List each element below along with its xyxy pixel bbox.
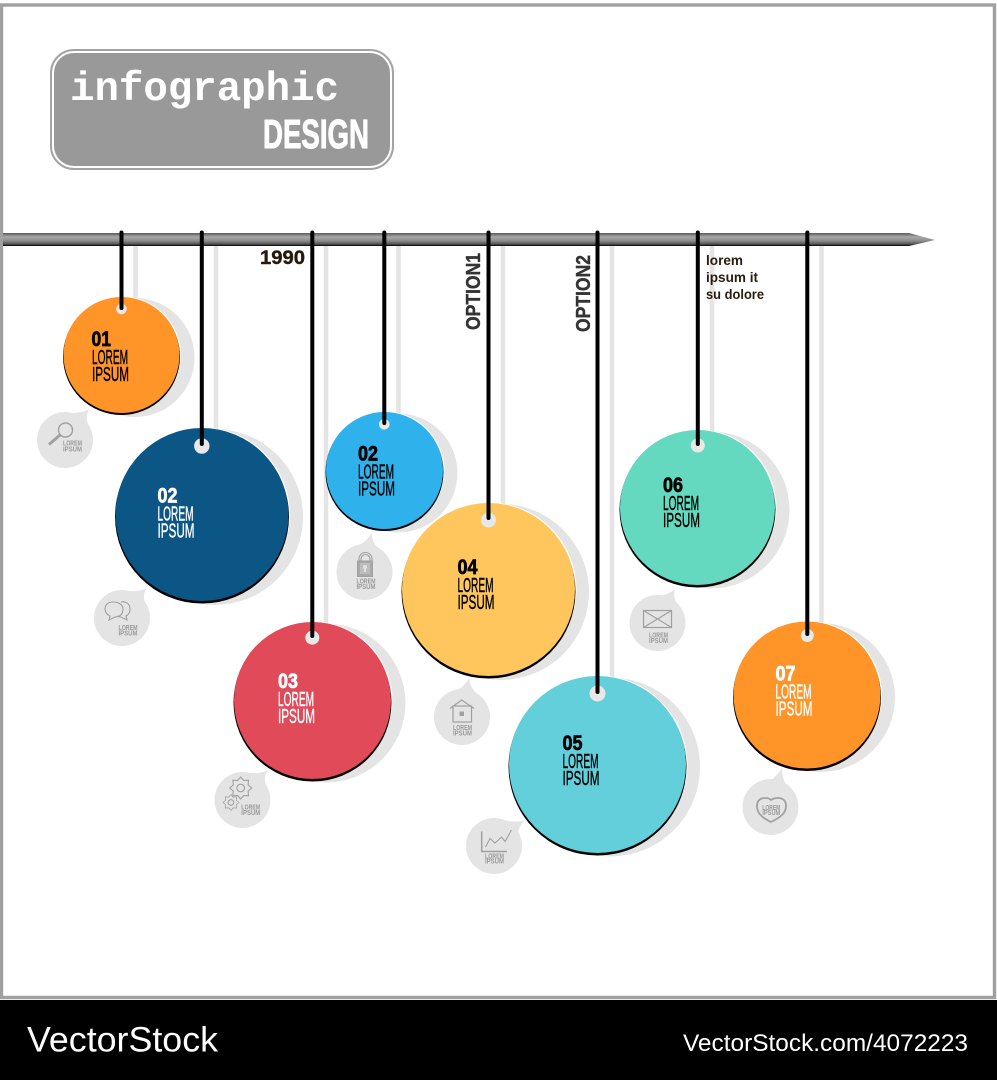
footer brand: VectorStock [27, 1020, 219, 1060]
icon: padlock [358, 552, 372, 576]
tag 02: navy: 02 [158, 485, 178, 508]
footer image id: VectorStock.com/4072223 [683, 1030, 968, 1057]
tag 02: sky blue: LOREM [358, 462, 394, 484]
tag 02: navy: LOREM [158, 504, 194, 526]
tag 05: aqua [508, 232, 700, 856]
tag 02: sky blue [326, 232, 458, 532]
tag 02: navy [115, 232, 303, 605]
callout: envelope [630, 589, 686, 651]
callout: gears: LOREM [241, 804, 260, 812]
callout: lock: LOREM [356, 578, 376, 586]
tag 06: mint [620, 232, 790, 588]
title: infographic: infographic [70, 67, 339, 113]
icon: gears [223, 777, 252, 810]
callout: house [434, 678, 490, 745]
tag 01: orange: 01 [92, 328, 111, 351]
tag 03: red: LOREM [278, 689, 314, 711]
callout: envelope: LOREM [649, 632, 668, 640]
callout: gears [214, 770, 270, 828]
callout: heart [742, 768, 798, 835]
tag 02: sky blue: 02 [358, 443, 378, 466]
callout: envelope: IPSUM [649, 638, 668, 645]
callout: lock [336, 533, 392, 600]
tag 02: sky blue: IPSUM [358, 478, 395, 500]
title: design: DESIGN [263, 111, 369, 157]
tag 07: orange: LOREM [776, 682, 812, 704]
label: option1: OPTION1 [463, 253, 485, 330]
tag 05: aqua: 05 [562, 732, 583, 755]
tag 07: orange: IPSUM [776, 698, 812, 720]
tag 01: orange: IPSUM [92, 364, 129, 386]
tag 03: red [234, 232, 406, 782]
icon: house [450, 700, 474, 722]
label: lorem ipsum it su dolore: lorem [706, 252, 743, 268]
callout: search [37, 409, 93, 468]
icon: magnifier [49, 423, 72, 444]
footer bar [0, 1000, 997, 1080]
callout: chart: IPSUM [485, 858, 504, 866]
label: lorem ipsum it su dolore [706, 252, 764, 302]
tag 01: orange [63, 232, 194, 417]
tag 01: orange: LOREM [92, 347, 128, 369]
callout: chart [466, 818, 525, 874]
title badge [51, 50, 393, 169]
label: lorem ipsum it su dolore: su dolore [706, 286, 764, 302]
tag 05: aqua: LOREM [562, 751, 598, 773]
timeline arrow [3, 233, 935, 246]
tag 03: red: IPSUM [278, 706, 315, 728]
label: option2: OPTION2 [573, 255, 595, 332]
callout: speech: LOREM [118, 625, 138, 632]
tag 03: red: 03 [278, 670, 298, 693]
tag 04: yellow: 04 [458, 556, 478, 579]
label: 1990: 1990 [260, 248, 305, 269]
tag 04: yellow: LOREM [458, 575, 494, 597]
tag 06: mint: IPSUM [663, 510, 700, 532]
tag 04: yellow [402, 232, 589, 680]
callout: chart: LOREM [485, 854, 504, 860]
callout: gears: IPSUM [241, 810, 260, 817]
callout: house: IPSUM [453, 730, 472, 738]
icon: speech bubbles [105, 602, 130, 620]
callout: house: LOREM [453, 725, 472, 732]
label: lorem ipsum it su dolore: ipsum it [706, 269, 758, 285]
tag 05: aqua: IPSUM [562, 768, 600, 790]
callout: lock: IPSUM [356, 584, 376, 591]
callout: speech [94, 588, 150, 646]
string shadows [136, 246, 822, 679]
tag 07: orange [733, 232, 895, 772]
icon: line chart [482, 830, 512, 852]
icon: envelope [644, 610, 672, 628]
callout: heart: LOREM [762, 805, 780, 812]
callout: search: LOREM [63, 440, 82, 448]
callout: heart: IPSUM [762, 810, 780, 817]
tag 06: mint: 06 [663, 474, 683, 497]
callout: search: IPSUM [63, 446, 82, 454]
tag 04: yellow: IPSUM [458, 592, 494, 614]
tag 06: mint: LOREM [663, 493, 699, 515]
tag 07: orange: 07 [776, 663, 796, 686]
callout: speech: IPSUM [118, 630, 138, 638]
tag 02: navy: IPSUM [158, 521, 194, 543]
icon: heart [757, 798, 786, 822]
